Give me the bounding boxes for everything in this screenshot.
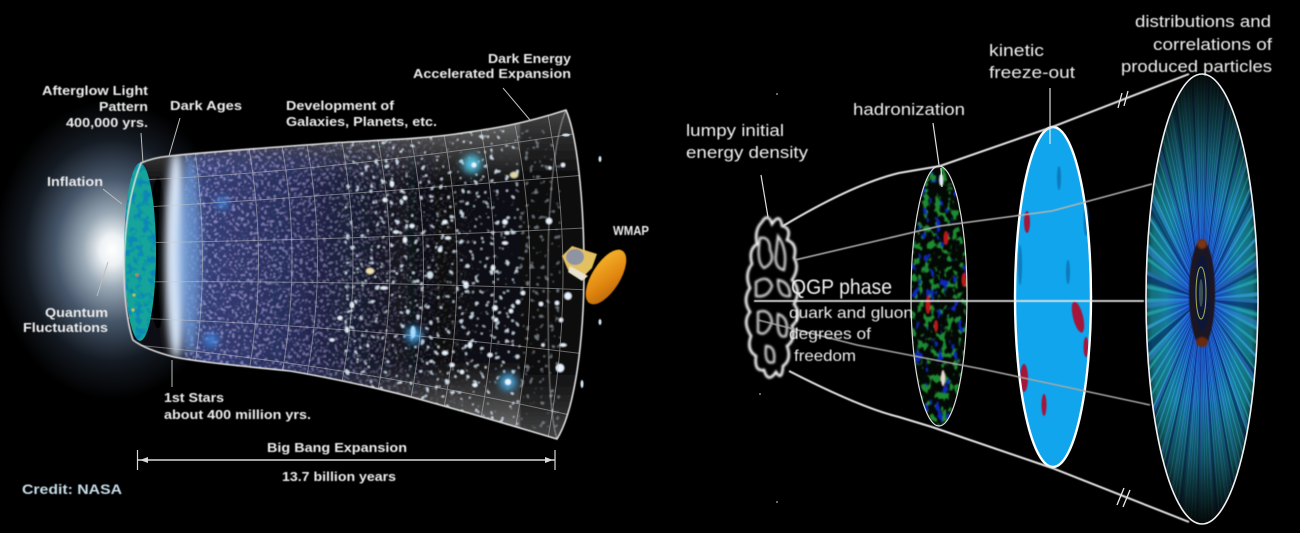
- labels: cosmic timeline: 13.7 billion years: [282, 469, 396, 484]
- final state particle disc: [1146, 74, 1258, 524]
- labels: cosmic timeline: about 400 million yrs.: [164, 407, 311, 422]
- expansion span arrow: [138, 450, 555, 470]
- labels: qgp phase: QGP phase: [791, 276, 892, 299]
- labels: collision stages: lumpy initial: [686, 121, 784, 140]
- labels: collision stages: correlations of: [1153, 35, 1272, 54]
- panel: heavy-ion collision evolution: [686, 12, 1272, 524]
- labels: cosmic timeline: Big Bang Expansion: [267, 440, 407, 455]
- labels: collision stages: energy density: [686, 143, 809, 162]
- small specks: [759, 93, 778, 503]
- cone outlines: [754, 74, 1189, 522]
- labels: qgp phase: freedom: [794, 348, 856, 365]
- labels: cosmic timeline: Dark Energy: [488, 51, 572, 66]
- hadronization disc: [908, 164, 970, 429]
- axis break marks: [1117, 91, 1130, 507]
- stars beyond funnel rim: [562, 134, 602, 388]
- big bang glow: [0, 100, 230, 400]
- leader lines: [97, 88, 530, 387]
- labels: collision stages: kinetic: [989, 41, 1045, 60]
- labels: cosmic timeline: 400,000 yrs.: [66, 115, 148, 130]
- labels: cosmic timeline: Galaxies, Planets, etc.: [286, 114, 437, 129]
- labels: cosmic timeline: Fluctuations: [23, 320, 108, 335]
- labels: cosmic timeline: Dark Ages: [170, 98, 242, 113]
- expanding universe funnel: [124, 110, 584, 438]
- labels: cosmic timeline: 1st Stars: [164, 390, 224, 405]
- labels: qgp phase: degrees of: [789, 326, 872, 343]
- funnel outline: [124, 110, 584, 439]
- labels: cosmic timeline: Accelerated Expansion: [413, 66, 571, 81]
- lumpy initial energy density blob: [746, 217, 798, 378]
- labels: cosmic timeline: [23, 51, 649, 484]
- panel: cosmic expansion timeline: [0, 51, 649, 497]
- wmap spacecraft: [562, 243, 634, 311]
- labels: cosmic timeline: Afterglow Light: [42, 83, 149, 98]
- star field highlights: [204, 155, 572, 390]
- leader lines: [761, 88, 1050, 217]
- labels: cosmic timeline: Quantum: [45, 305, 108, 320]
- labels: cosmic timeline: Development of: [286, 98, 395, 113]
- labels: collision stages: freeze-out: [989, 63, 1075, 82]
- credit: Credit: NASA: [22, 481, 122, 497]
- labels: cosmic timeline: WMAP: [613, 223, 649, 238]
- microwave background oval: [124, 163, 156, 341]
- labels: collision stages: [686, 12, 1272, 162]
- labels: cosmic timeline: Inflation: [47, 174, 103, 189]
- labels: collision stages: hadronization: [853, 100, 965, 119]
- labels: collision stages: produced particles: [1121, 57, 1272, 76]
- labels: collision stages: distributions and: [1135, 12, 1271, 31]
- kinetic freeze-out disc: [1015, 127, 1091, 467]
- labels: qgp phase: [789, 276, 913, 365]
- grid lines: [122, 115, 590, 438]
- labels: qgp phase: quark and gluon: [789, 305, 913, 322]
- labels: cosmic timeline: Pattern: [99, 99, 148, 114]
